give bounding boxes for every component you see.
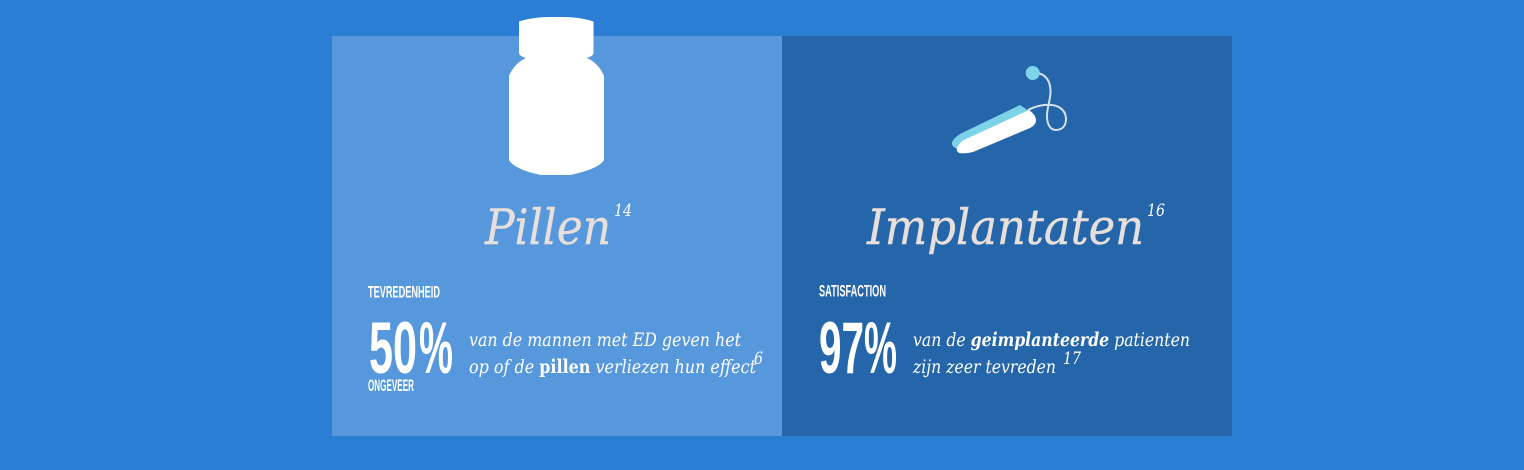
footnote: 17: 17 bbox=[1063, 349, 1081, 369]
heading: Pillen: Pillen bbox=[484, 199, 611, 256]
text block: implantaten description: van de geimplanteerde patienten bbox=[913, 329, 1190, 351]
footnote: 14: 14 bbox=[614, 201, 632, 221]
label: satisfaction: SATISFACTION bbox=[819, 282, 886, 300]
text block: pillen description bbox=[469, 329, 756, 378]
text block: pillen description: van de mannen met ED geven het bbox=[469, 329, 741, 351]
label: tevredenheid: TEVREDENHEID bbox=[368, 284, 440, 302]
icon: pill bottle bbox=[509, 17, 604, 175]
text block: pillen description: op of de pillen verliezen hun effect bbox=[469, 356, 756, 378]
statistic: 97%: 97 bbox=[819, 308, 864, 389]
icon: implant bbox=[952, 66, 1066, 153]
text block: implantaten description: zijn zeer tevreden bbox=[912, 356, 1056, 378]
statistic: 97%: % bbox=[864, 308, 897, 389]
statistic: 50%: % bbox=[419, 308, 453, 389]
text block: implantaten description bbox=[912, 329, 1190, 378]
statistic: 50%: 50 bbox=[369, 308, 417, 389]
panel background: implantaten bbox=[782, 36, 1232, 436]
footnote: 16: 16 bbox=[1147, 201, 1165, 221]
footnote: 6: 6 bbox=[754, 349, 763, 369]
heading: Implantaten: Implantaten bbox=[866, 199, 1144, 256]
panel: pillen: ONGEVEER bbox=[368, 377, 414, 395]
panel: implantaten bbox=[782, 36, 1232, 436]
panel background: pillen bbox=[332, 36, 782, 436]
panel: pillen bbox=[332, 17, 782, 436]
